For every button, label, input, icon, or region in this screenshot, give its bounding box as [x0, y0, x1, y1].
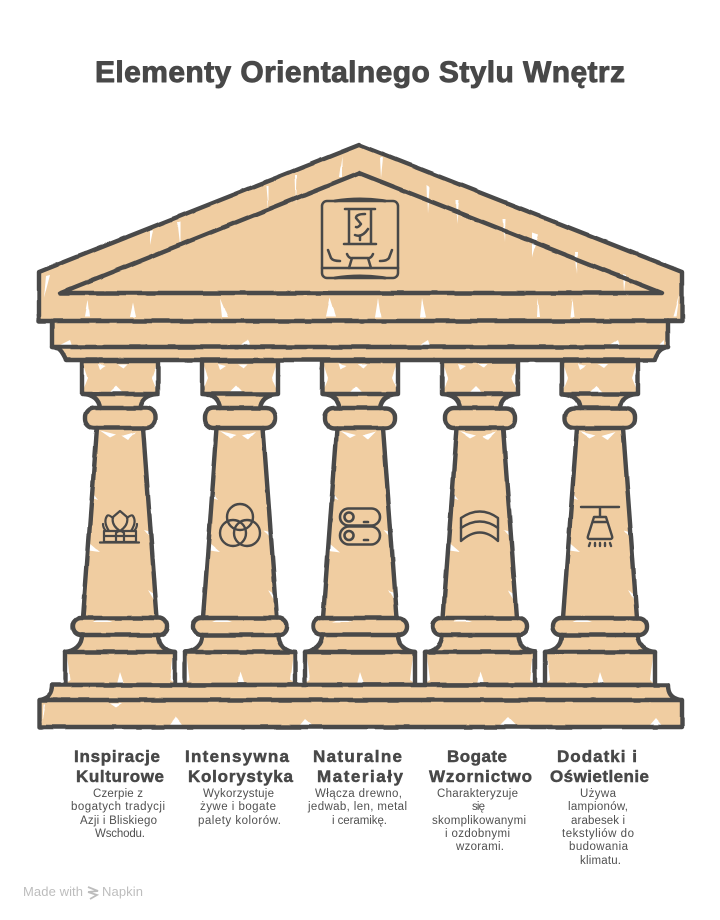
- footer: Made with Napkin: Napkin: [102, 884, 143, 899]
- label: Dodatki i Oświetlenie: Dodatki i: [557, 747, 637, 766]
- label: Inspiracje Kulturowe: Czerpie z: [93, 788, 143, 800]
- roof pediment: [39, 145, 682, 360]
- label: Dodatki i Oświetlenie: tekstyliów do: [562, 828, 634, 840]
- label: Naturalne Materiały: Materiały: [317, 767, 404, 786]
- label: Bogate Wzornictwo: [429, 747, 532, 853]
- icon: wood logs: [340, 508, 380, 544]
- label: Dodatki i Oświetlenie: arabesek i: [571, 815, 625, 827]
- label: Inspiracje Kulturowe: Azji i Bliskiego: [80, 815, 157, 827]
- label: Naturalne Materiały: jedwab, len, metal: [307, 801, 407, 813]
- column 5: [545, 361, 655, 685]
- plinth: [39, 685, 682, 727]
- label: Intensywna Kolorystyka: Wykorzystuje: [203, 788, 274, 800]
- column 4: [425, 361, 535, 685]
- label: Naturalne Materiały: [307, 747, 407, 827]
- label: Naturalne Materiały: Włącza drewno,: [315, 788, 402, 800]
- label: Intensywna Kolorystyka: [185, 747, 294, 827]
- footer: Made with Napkin: Made with: [23, 884, 83, 899]
- label: Inspiracje Kulturowe: [71, 747, 165, 840]
- label: Intensywna Kolorystyka: żywe i bogate: [200, 801, 276, 813]
- label: Bogate Wzornictwo: i ozdobnymi: [445, 828, 510, 840]
- label: Dodatki i Oświetlenie: klimatu.: [580, 855, 621, 867]
- column 2: [185, 361, 295, 685]
- label: Dodatki i Oświetlenie: Używa: [580, 788, 617, 800]
- label: Inspiracje Kulturowe: Inspiracje: [74, 747, 160, 766]
- title: Elementy Orientalnego Stylu Wnętrz: [95, 56, 625, 89]
- label: Bogate Wzornictwo: się: [472, 801, 485, 813]
- label: Dodatki i Oświetlenie: [550, 747, 649, 867]
- column 1: [65, 361, 175, 685]
- icon: ornate pediment frame: [322, 199, 398, 278]
- label: Intensywna Kolorystyka: Kolorystyka: [188, 767, 294, 786]
- label: Dodatki i Oświetlenie: lampionów,: [568, 801, 628, 813]
- icon: lotus temple: [100, 511, 139, 542]
- icon: three overlapping circles: [220, 504, 260, 546]
- temple illustration: [39, 145, 682, 727]
- label: Bogate Wzornictwo: wzorami.: [455, 841, 504, 853]
- label: Intensywna Kolorystyka: Intensywna: [185, 747, 290, 766]
- label: Bogate Wzornictwo: Charakteryzuje: [437, 788, 518, 800]
- label: Bogate Wzornictwo: skomplikowanymi: [432, 815, 526, 827]
- label: Intensywna Kolorystyka: palety kolorów.: [198, 815, 281, 827]
- label: Inspiracje Kulturowe: Kulturowe: [76, 767, 164, 786]
- icon: layered arches: [461, 512, 498, 541]
- icon: hanging lamp: [581, 507, 619, 546]
- label: Dodatki i Oświetlenie: Oświetlenie: [550, 767, 649, 786]
- label: Inspiracje Kulturowe: Wschodu.: [95, 828, 145, 840]
- label: Dodatki i Oświetlenie: budowania: [569, 841, 629, 853]
- column 3: [305, 361, 415, 685]
- label: Bogate Wzornictwo: Wzornictwo: [429, 767, 532, 786]
- label: Naturalne Materiały: i ceramikę.: [332, 815, 387, 827]
- label: Bogate Wzornictwo: Bogate: [447, 747, 507, 766]
- footer: Made with Napkin: [23, 884, 143, 899]
- label: Inspiracje Kulturowe: bogatych tradycji: [71, 801, 165, 813]
- label: Naturalne Materiały: Naturalne: [313, 747, 402, 766]
